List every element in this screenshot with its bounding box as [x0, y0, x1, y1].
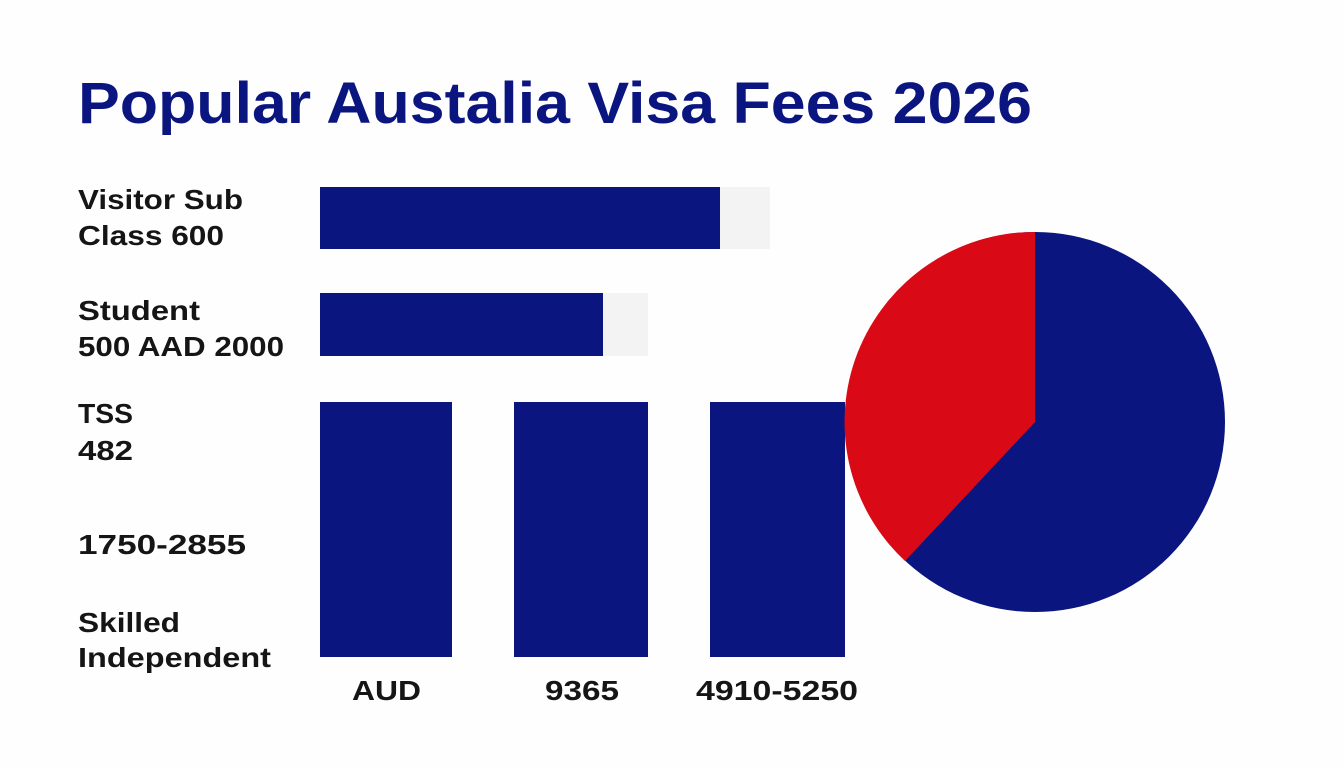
label: TSS	[78, 398, 133, 466]
pie chart	[845, 232, 1225, 612]
bottom labels: AUD	[352, 675, 421, 706]
bottom labels: 9365	[545, 675, 619, 706]
label: visitor: Visitor Sub	[78, 184, 243, 215]
vertical bars	[320, 402, 845, 657]
bottom labels: 4910-5250	[696, 675, 858, 706]
label: range: 1750-2855	[78, 529, 246, 560]
label: student	[78, 295, 284, 362]
bar: student	[320, 293, 648, 356]
title: Popular Austalia Visa Fees 2026	[78, 71, 1032, 136]
label: skilled: Independent	[78, 642, 271, 673]
label: TSS: TSS	[78, 398, 133, 429]
label: TSS: 482	[78, 435, 133, 466]
label: visitor	[78, 184, 243, 251]
bar: visitor	[320, 187, 770, 249]
bottom labels	[352, 675, 858, 706]
label: visitor: Class 600	[78, 220, 224, 251]
label: skilled	[78, 607, 271, 673]
label: skilled: Skilled	[78, 607, 180, 638]
label: student: 500 AAD 2000	[78, 331, 284, 362]
label: student: Student	[78, 295, 200, 326]
